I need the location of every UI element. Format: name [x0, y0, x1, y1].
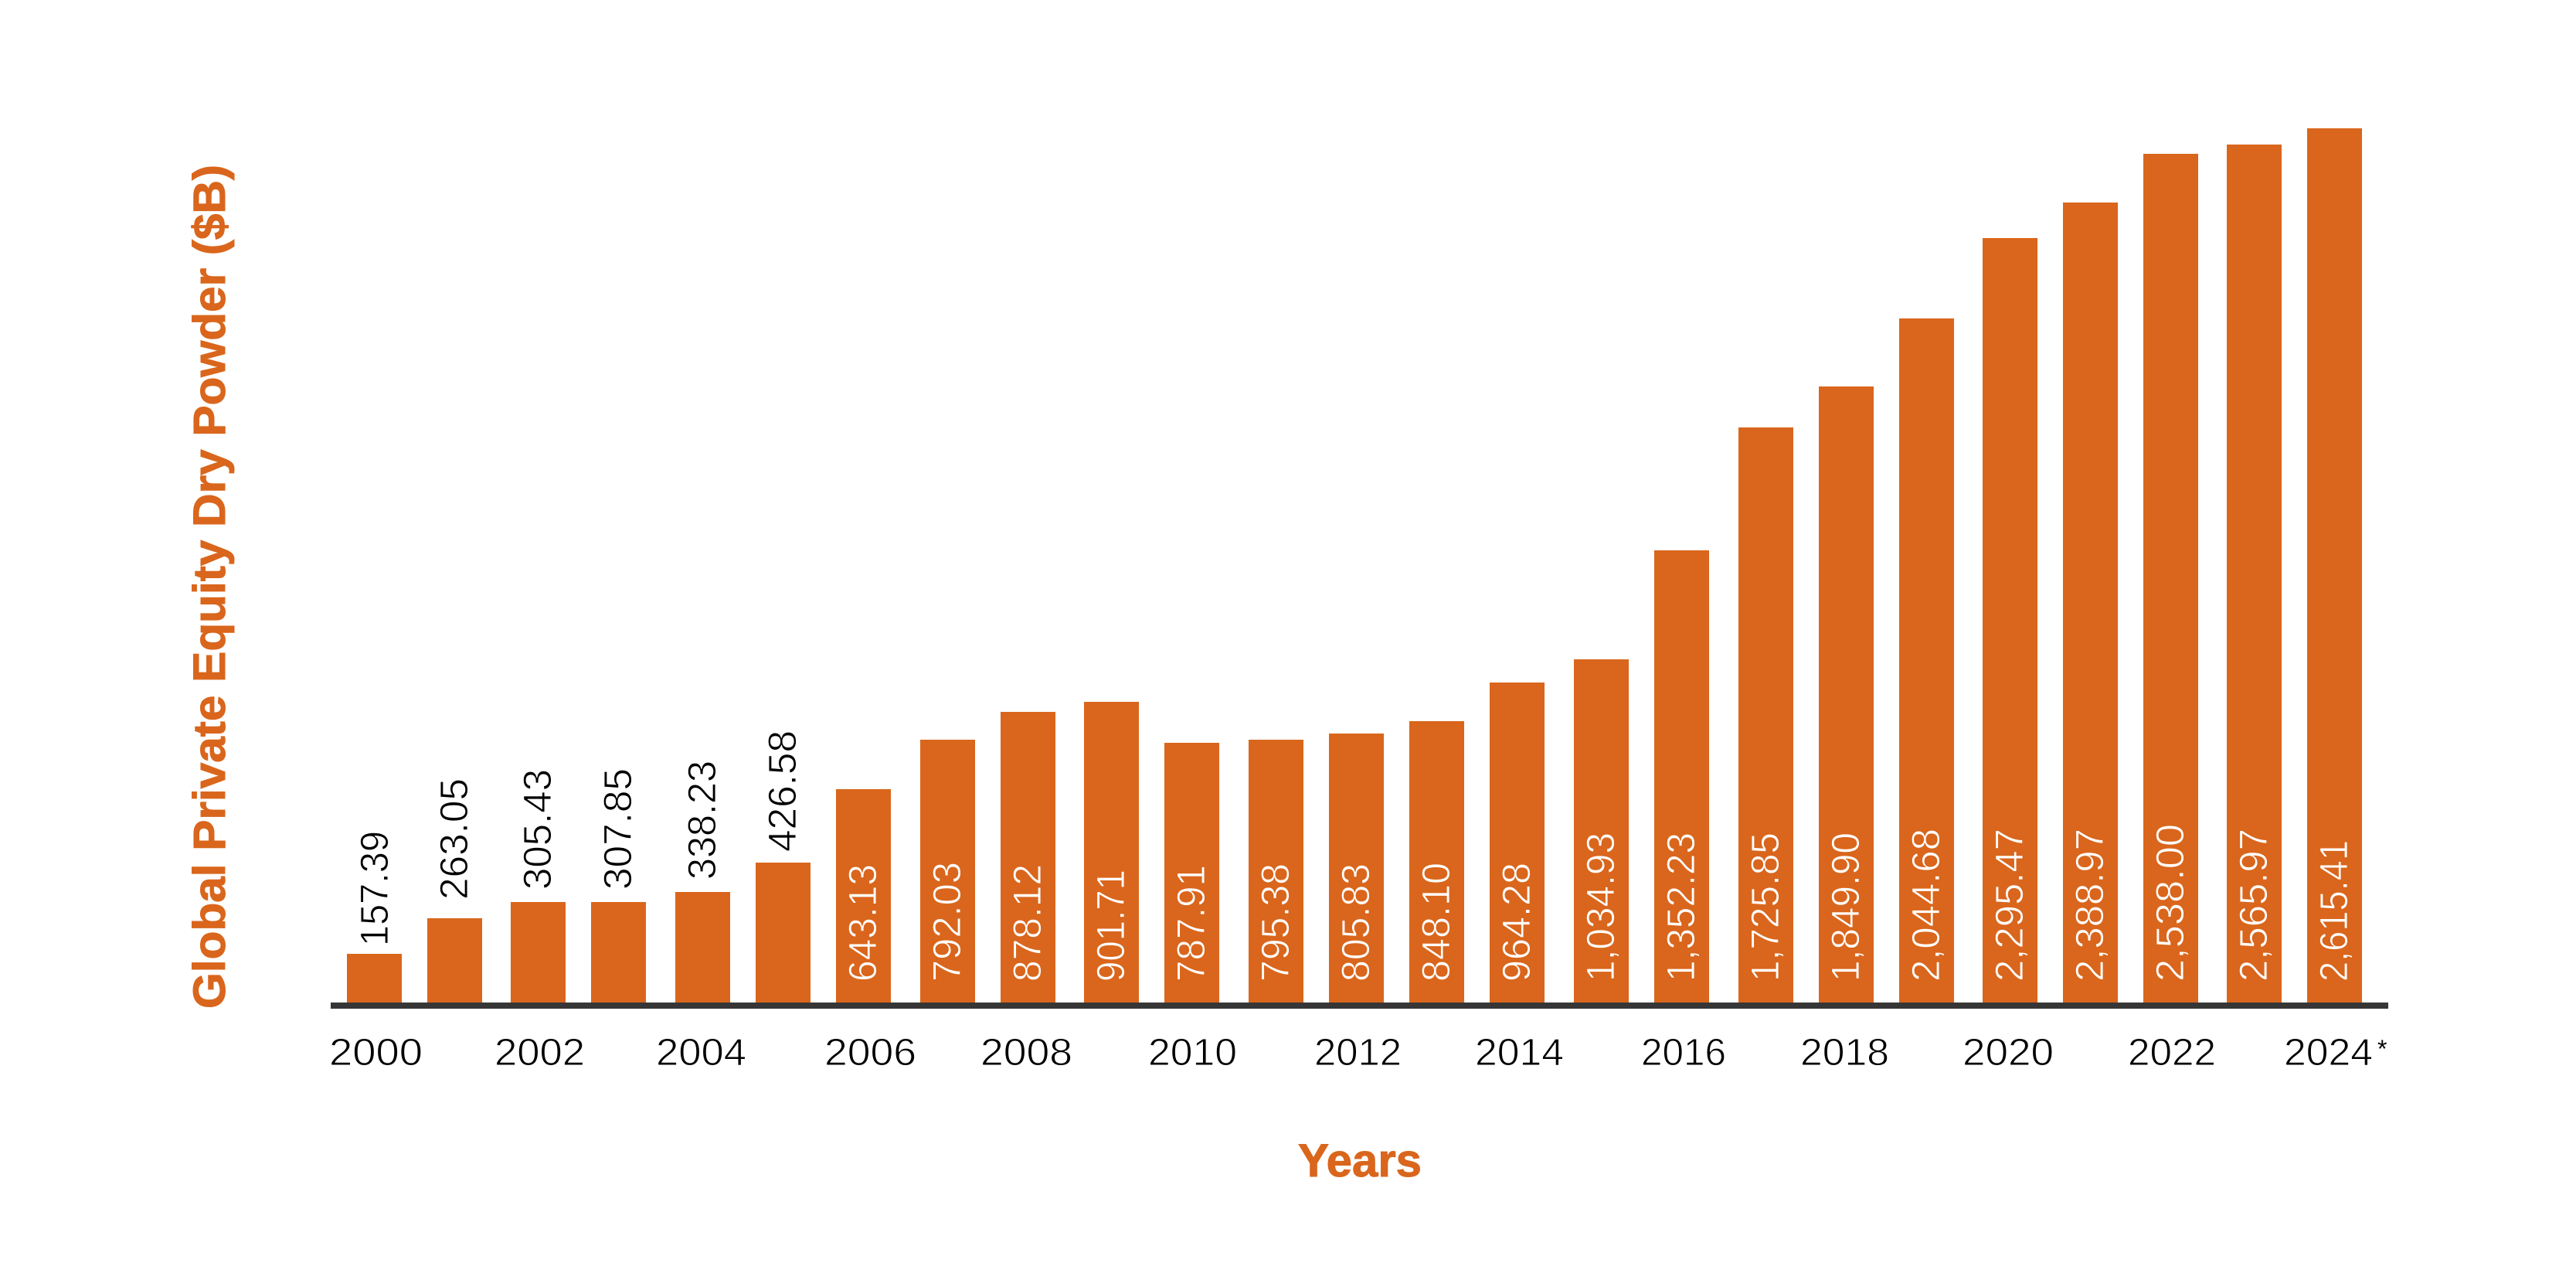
- bar 2001: 263.05: [432, 778, 476, 900]
- bar 2007: [920, 740, 975, 1003]
- bar 2011: [1249, 740, 1303, 1003]
- x-axis title: Years: [1298, 1135, 1422, 1186]
- bar 2000: 157.39: [352, 831, 396, 946]
- x-axis year labels: 2018: [1800, 1032, 1889, 1074]
- bar 2018: [1819, 386, 1874, 1003]
- bar 2023: [2227, 145, 2282, 1003]
- bar 2010: [1164, 743, 1219, 1003]
- bar 2005: [756, 730, 811, 1003]
- x-axis year labels: 2008: [980, 1032, 1072, 1074]
- bar 2001: [427, 778, 482, 1003]
- x-axis year labels: 2022: [2128, 1032, 2216, 1074]
- x-axis year labels: 2014: [1475, 1032, 1564, 1074]
- bar 2021: [2063, 203, 2118, 1003]
- bar 2008: [1001, 712, 1055, 1003]
- bar 2024: 2,615.41: [2312, 840, 2356, 982]
- bar 2022: [2143, 154, 2198, 1003]
- x-axis year labels: 2012: [1314, 1032, 1402, 1074]
- x-axis year labels: [329, 1032, 2387, 1074]
- x-axis year labels: 2000: [329, 1032, 423, 1074]
- bar 2010: 787.91: [1169, 865, 1213, 982]
- x-axis year labels: 2020: [1963, 1032, 2054, 1074]
- bar 2021: 2,388.97: [2068, 829, 2112, 982]
- bar 2007: 792.03: [925, 862, 969, 982]
- bar 2016: [1654, 550, 1709, 1003]
- bar 2013: [1409, 721, 1464, 1003]
- bar 2012: [1329, 734, 1384, 1003]
- bar 2017: [1738, 427, 1793, 1003]
- bar 2009: 901.71: [1089, 870, 1133, 982]
- bar 2004: [675, 761, 730, 1003]
- bar 2014: 964.28: [1494, 863, 1538, 982]
- x-axis year labels: 2002: [494, 1032, 585, 1074]
- x-axis year labels: 2006: [824, 1032, 916, 1074]
- bar 2003: 307.85: [596, 768, 640, 890]
- x-axis year labels: 2010: [1148, 1032, 1237, 1074]
- bar 2014: [1490, 683, 1545, 1003]
- bar 2023: 2,565.97: [2231, 829, 2275, 982]
- bar 2000: [347, 831, 402, 1003]
- bar 2017: 1,725.85: [1743, 832, 1787, 982]
- bar 2004: 338.23: [680, 761, 724, 880]
- x-axis year labels: 2016: [1641, 1032, 1726, 1074]
- bar 2009: [1084, 702, 1139, 1003]
- bar 2022: 2,538.00: [2148, 824, 2192, 982]
- bar 2006: [836, 789, 891, 1003]
- bar 2016: 1,352.23: [1659, 832, 1703, 982]
- bar 2003: [591, 768, 646, 1003]
- x-axis year labels: 2024: [2284, 1032, 2373, 1074]
- bar 2024: [2307, 128, 2362, 1003]
- bar 2012: 805.83: [1334, 863, 1378, 982]
- bar chart: [347, 128, 2362, 1003]
- bar 2019: 2,044.68: [1904, 829, 1948, 982]
- bar 2015: [1574, 659, 1629, 1003]
- bar 2018: 1,849.90: [1823, 832, 1867, 982]
- bar 2005: 426.58: [760, 730, 804, 852]
- bar 2015: 1,034.93: [1579, 832, 1623, 982]
- x-axis year labels: 2004: [656, 1032, 746, 1074]
- bar 2020: [1983, 238, 2037, 1003]
- bar 2002: 305.43: [515, 769, 559, 890]
- bar 2013: 848.10: [1414, 863, 1458, 982]
- bar 2002: [511, 769, 566, 1003]
- x axis line: [331, 1003, 2388, 1009]
- bar 2008: 878.12: [1005, 864, 1049, 982]
- y-axis title: Global Private Equity Dry Powder ($B): [185, 165, 235, 1009]
- x-axis year labels: *: [2377, 1035, 2387, 1063]
- bar 2011: 795.38: [1253, 863, 1297, 982]
- bar 2006: 643.13: [841, 864, 885, 982]
- bar 2020: 2,295.47: [1987, 829, 2031, 982]
- bar 2019: [1899, 318, 1954, 1003]
